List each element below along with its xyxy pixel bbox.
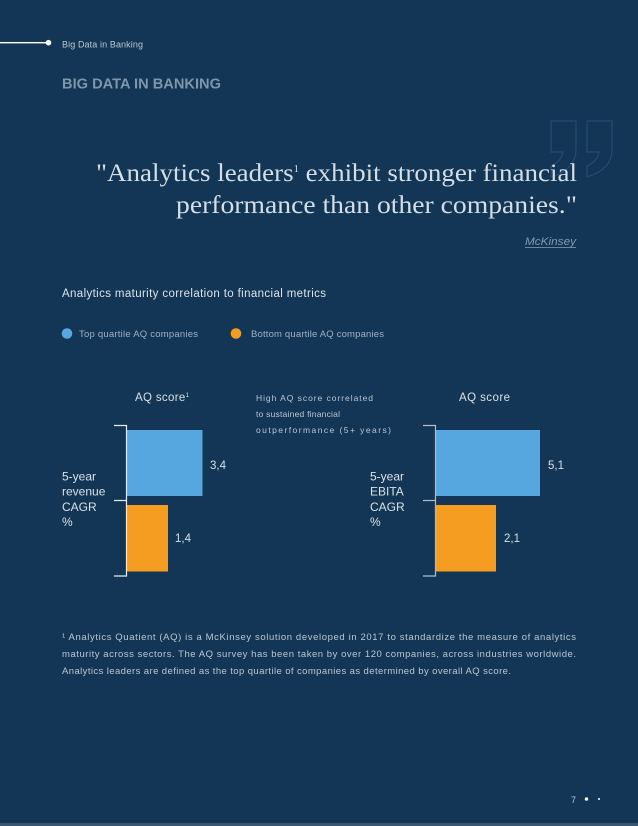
- header line with dot marker: [0, 40, 51, 46]
- axis label: 5-year EBITA CAGR: EBITA: [370, 484, 404, 498]
- running header: Big Data in Banking: [62, 40, 143, 50]
- value 3,4: 3,4: [210, 460, 227, 472]
- axis label: 5-year EBITA CAGR: 5-year: [370, 470, 404, 484]
- footnote: [62, 632, 576, 677]
- axis label: 5-year revenue CAGR: 5-year: [62, 470, 96, 484]
- icon: decorative closing quotation marks: [551, 121, 612, 177]
- quote source: McKinsey: [525, 236, 578, 248]
- legend: [62, 328, 384, 340]
- quote: 1: [294, 164, 299, 175]
- axis label: 5-year revenue CAGR: CAGR: [62, 500, 97, 514]
- value 5,1: 5,1: [548, 460, 564, 472]
- page heading: BIG DATA IN BANKING: [62, 76, 221, 92]
- quote: exhibit stronger financial: [299, 158, 577, 187]
- bracket: [423, 426, 436, 576]
- axis label: 5-year EBITA CAGR: [370, 470, 405, 529]
- callout: High AQ score correlated: [256, 393, 373, 403]
- chart heading: AQ score: AQ score: [135, 392, 185, 404]
- panel: revenue CAGR chart: [62, 392, 227, 576]
- axis label: 5-year revenue CAGR: [62, 470, 106, 529]
- legend: Top quartile AQ companies: [79, 329, 198, 340]
- quote: "Analytics leaders: [96, 158, 283, 187]
- callout: [256, 393, 391, 435]
- axis label: 5-year EBITA CAGR: %: [370, 515, 381, 529]
- quote: [96, 158, 577, 219]
- legend: Bottom quartile AQ companies: [251, 329, 384, 340]
- axis label: 5-year EBITA CAGR: CAGR: [370, 500, 405, 514]
- chart heading: AQ score: AQ score: [459, 392, 510, 404]
- bar: top quartile 5,1: [436, 430, 540, 496]
- bracket: [114, 426, 126, 576]
- chart heading: AQ score: 1: [186, 393, 190, 399]
- chart title: Analytics maturity correlation to financial metrics: [62, 288, 326, 300]
- value 1,4: 1,4: [175, 533, 192, 545]
- callout: outperformance (5+ years): [256, 425, 391, 435]
- pagination dots: [585, 797, 600, 801]
- page number: 7: [571, 795, 576, 805]
- panel: EBITA CAGR chart: [370, 392, 564, 576]
- value 2,1: 2,1: [504, 533, 520, 545]
- bar: bottom quartile 1,4: [127, 505, 168, 572]
- bar: bottom quartile 2,1: [436, 505, 496, 572]
- footnote: ¹ Analytics Quatient (AQ) is a McKinsey solution developed in 2017 to standardize the measure of analytics: [62, 632, 576, 643]
- bar: top quartile 3,4: [127, 430, 202, 496]
- quote: performance than other companies.": [176, 190, 577, 219]
- axis label: 5-year revenue CAGR: revenue: [62, 484, 106, 498]
- footnote: Analytics leaders are defined as the top quartile of companies as determined by overall AQ score.: [62, 666, 511, 677]
- callout: to sustained financial: [256, 409, 340, 419]
- footnote: maturity across sectors. The AQ survey has been taken by over 120 companies, across industries worldwide.: [62, 649, 576, 660]
- axis label: 5-year revenue CAGR: %: [62, 515, 73, 529]
